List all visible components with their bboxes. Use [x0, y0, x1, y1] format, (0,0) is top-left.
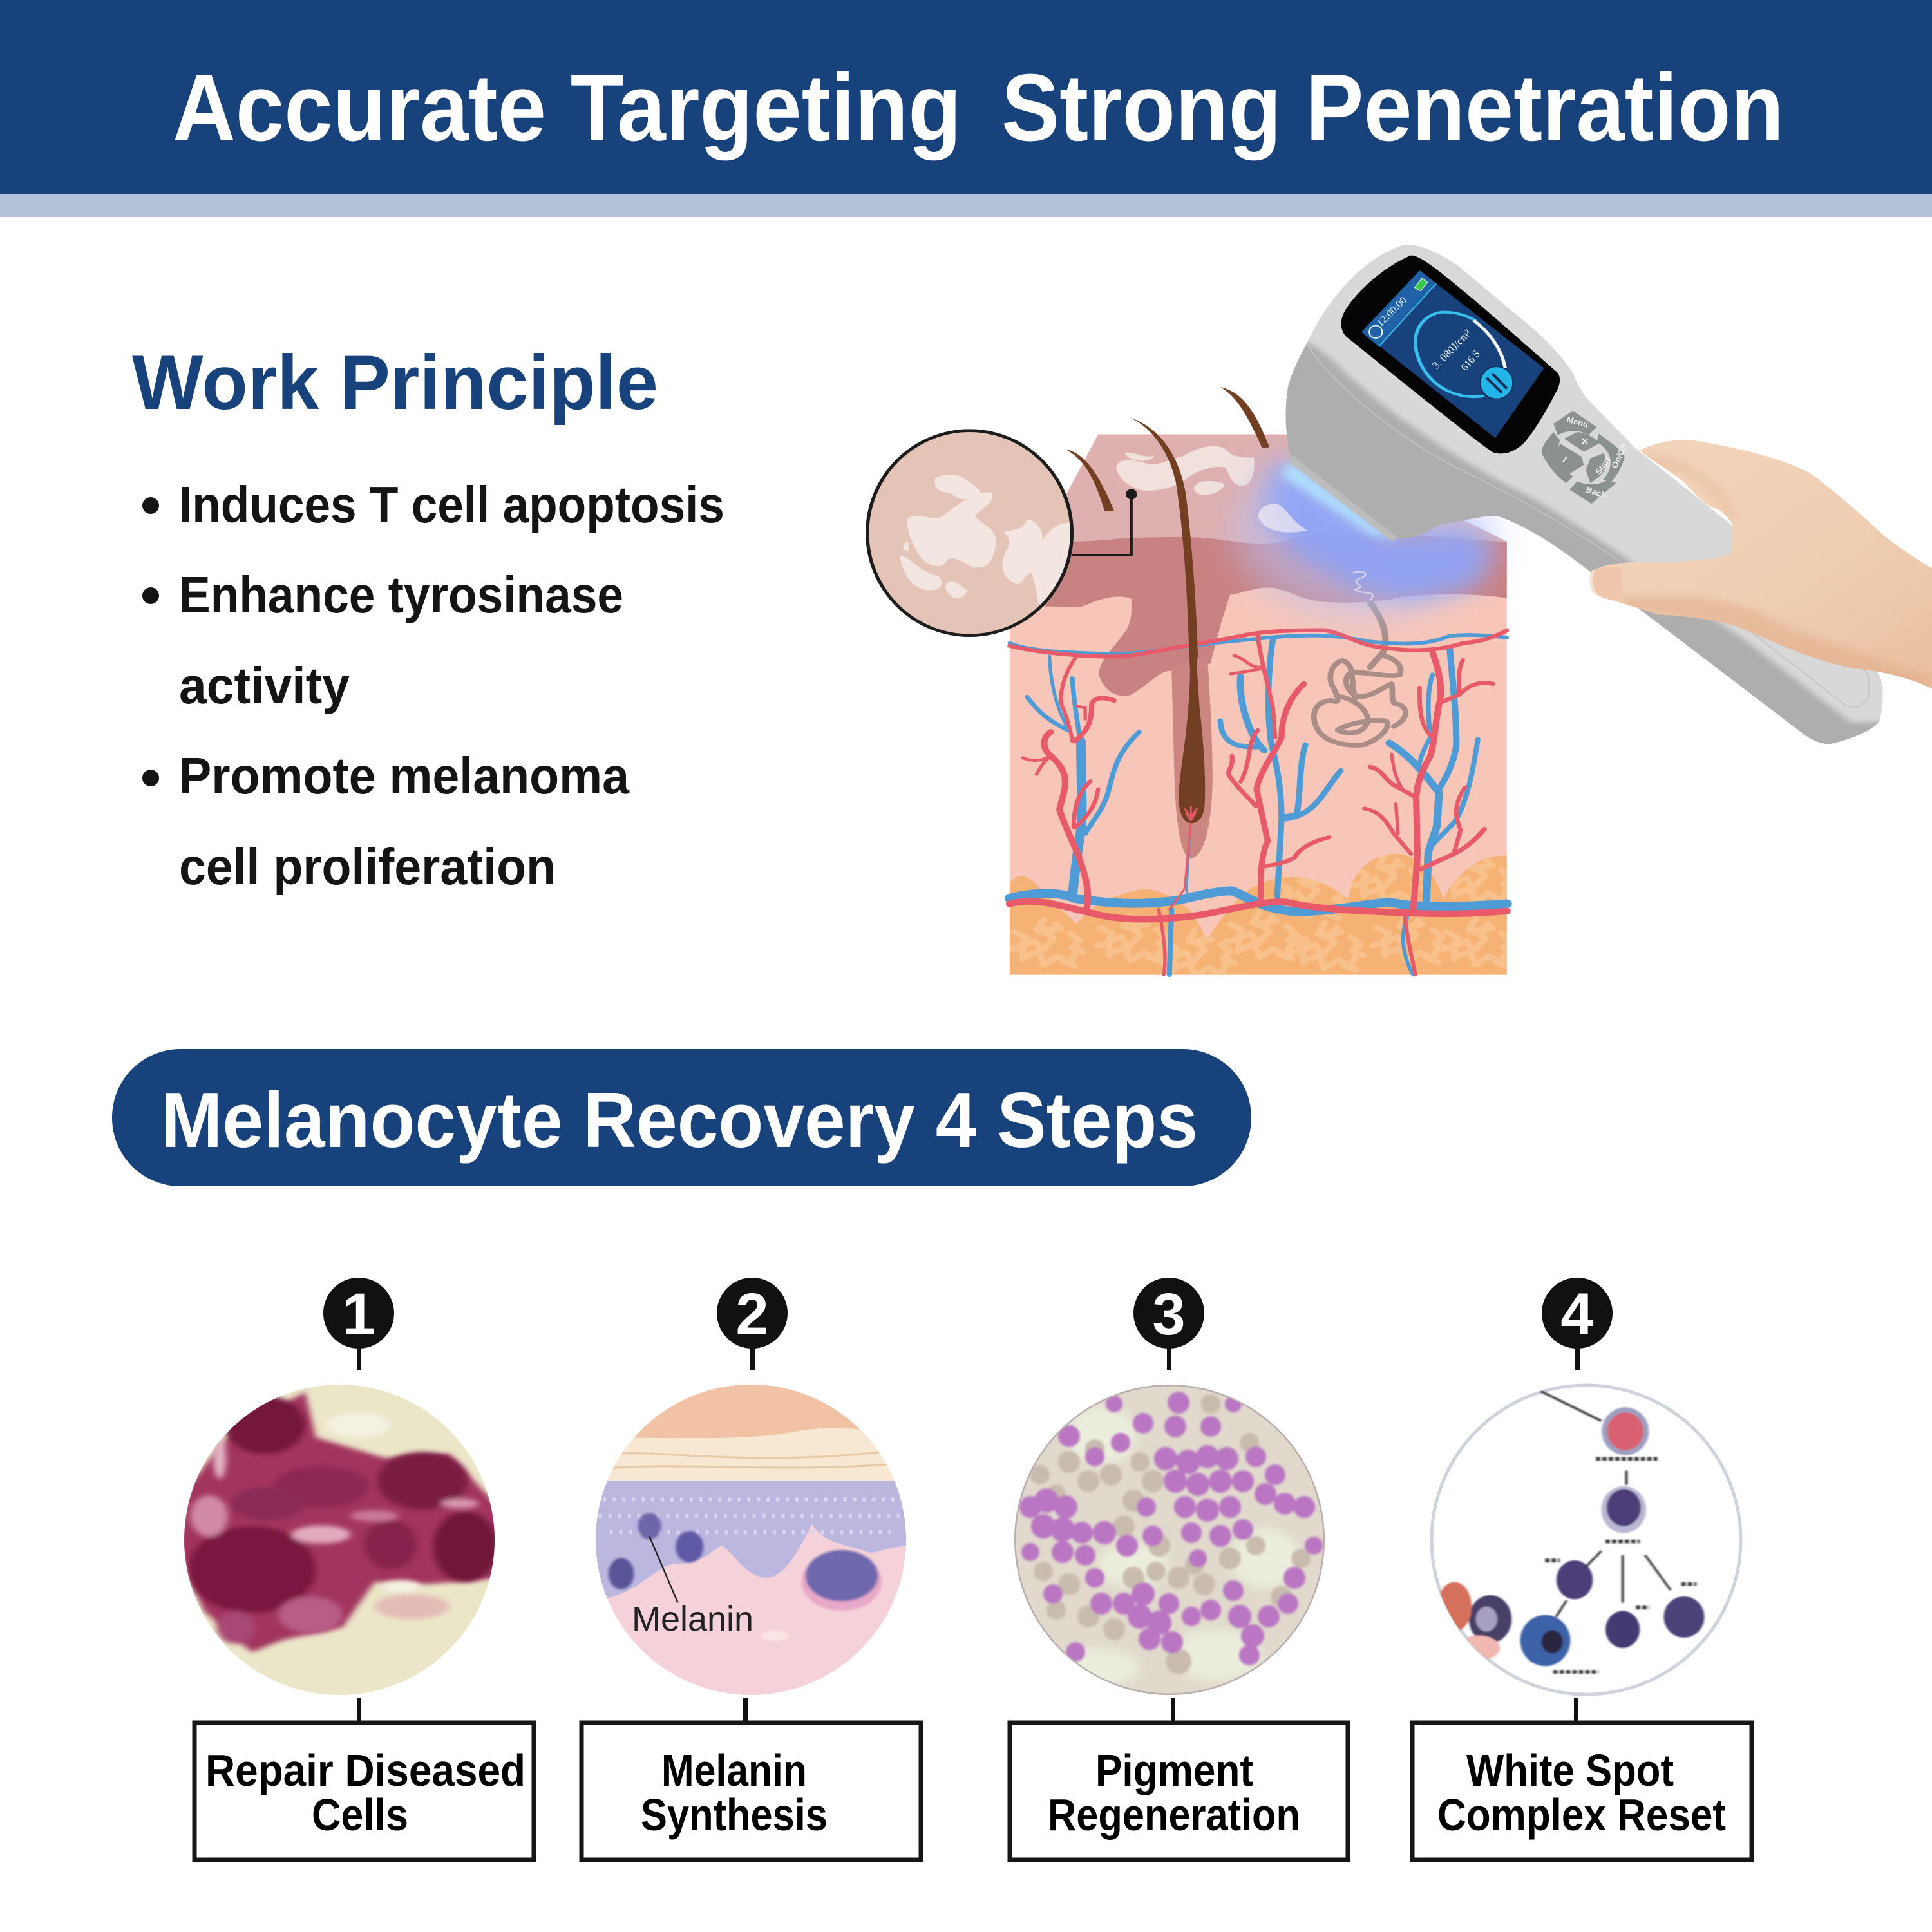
- title: [173, 55, 1784, 161]
- step 2 label box: Synthesis: [641, 1790, 828, 1840]
- step 2 connector: [743, 1698, 748, 1722]
- callout connector: [1072, 490, 1136, 555]
- device button labels: Menu: [1566, 414, 1589, 430]
- blue veins: [1010, 635, 1507, 975]
- device screen text: [1375, 295, 1482, 374]
- step 2 micrograph: melanin: Melanin: [632, 1600, 753, 1638]
- step 4 micrograph: cell differentiation: [1432, 1385, 1741, 1694]
- skin cross-section diagram: [867, 387, 1515, 977]
- step 3 label box: Pigment: [1095, 1745, 1253, 1795]
- heading: work principle: Work Principle: [132, 339, 658, 426]
- step 3: [1010, 1278, 1348, 1860]
- fat layer: [1010, 854, 1515, 977]
- step 3 number badge: 3: [1152, 1282, 1186, 1347]
- step 2 label box: Melanin: [661, 1745, 807, 1795]
- device screen text: 616 S: [1459, 348, 1482, 374]
- step 1 micrograph: diseased cells: [177, 1381, 503, 1700]
- text block: work principle bullets: cell proliferation: [179, 838, 556, 895]
- hair papilla: [1184, 806, 1197, 820]
- device button labels: −: [1557, 453, 1573, 467]
- step 1 number badge: 1: [342, 1282, 375, 1347]
- hand: [1591, 440, 1932, 698]
- step 3 number badge: [1133, 1278, 1204, 1370]
- device body: [1286, 238, 1903, 744]
- text block: work principle bullets: activity: [179, 657, 350, 714]
- device button labels: [1557, 414, 1629, 500]
- sweat gland: [1314, 603, 1406, 745]
- handheld device: [1286, 238, 1932, 744]
- device button labels: ×: [1581, 435, 1589, 449]
- hair follicle and hairs: [1065, 387, 1269, 823]
- step 4: [1412, 1278, 1752, 1860]
- red arteries: [1010, 630, 1507, 975]
- step 1 label box: Cells: [312, 1790, 408, 1840]
- step 2 micrograph: melanin: [588, 1379, 919, 1700]
- step 4 number badge: [1542, 1278, 1613, 1370]
- device button labels: Start: [1593, 455, 1613, 477]
- header band: [0, 0, 1932, 217]
- title: Accurate Targeting: [173, 55, 961, 161]
- step 3 label box: Regeneration: [1048, 1790, 1300, 1840]
- section pill: melanocyte recovery: Melanocyte Recovery 4 Steps: [161, 1076, 1198, 1164]
- step 2 label box: [582, 1723, 921, 1860]
- device screen: [1341, 256, 1560, 453]
- step 2 number badge: [717, 1278, 788, 1370]
- magnified skin circle: [867, 431, 1072, 636]
- step 2 number badge: 2: [735, 1282, 769, 1347]
- step 1 number badge: [323, 1278, 394, 1370]
- text block: work principle bullets: Promote melanoma: [179, 747, 629, 804]
- step 3 label box: [1010, 1723, 1348, 1860]
- title: Strong Penetration: [1001, 55, 1784, 161]
- step 4 label box: Complex Reset: [1437, 1790, 1726, 1840]
- step 1: [177, 1278, 534, 1860]
- text block: work principle bullets: Enhance tyrosinase: [179, 566, 623, 623]
- device button labels: Back: [1585, 485, 1607, 500]
- step 1 label box: Repair Diseased: [205, 1745, 526, 1795]
- device button labels: On/Off: [1609, 442, 1629, 469]
- blue light glow: [1234, 442, 1493, 619]
- step 1 connector: [357, 1698, 361, 1722]
- step 3 connector: [1171, 1698, 1175, 1722]
- step 3 micrograph: pigment cells: [1011, 1381, 1333, 1700]
- device buttons: [1542, 411, 1625, 504]
- skin layers: [1010, 434, 1507, 975]
- step 4 connector: [1574, 1698, 1578, 1722]
- device screen text: 12:00:00: [1375, 295, 1409, 329]
- text block: work principle bullets: Induces T cell apoptosis: [179, 476, 724, 533]
- step 2: [582, 1278, 921, 1860]
- step 4 number badge: 4: [1560, 1282, 1594, 1347]
- section pill: melanocyte recovery: [112, 1049, 1251, 1186]
- step 4 label box: White Spot: [1466, 1745, 1674, 1795]
- device screen text: 3. 080J/cm²: [1430, 327, 1473, 372]
- step 1 label box: [194, 1723, 534, 1860]
- text block: work principle bullets: [142, 476, 724, 895]
- step 4 label box: [1412, 1723, 1752, 1860]
